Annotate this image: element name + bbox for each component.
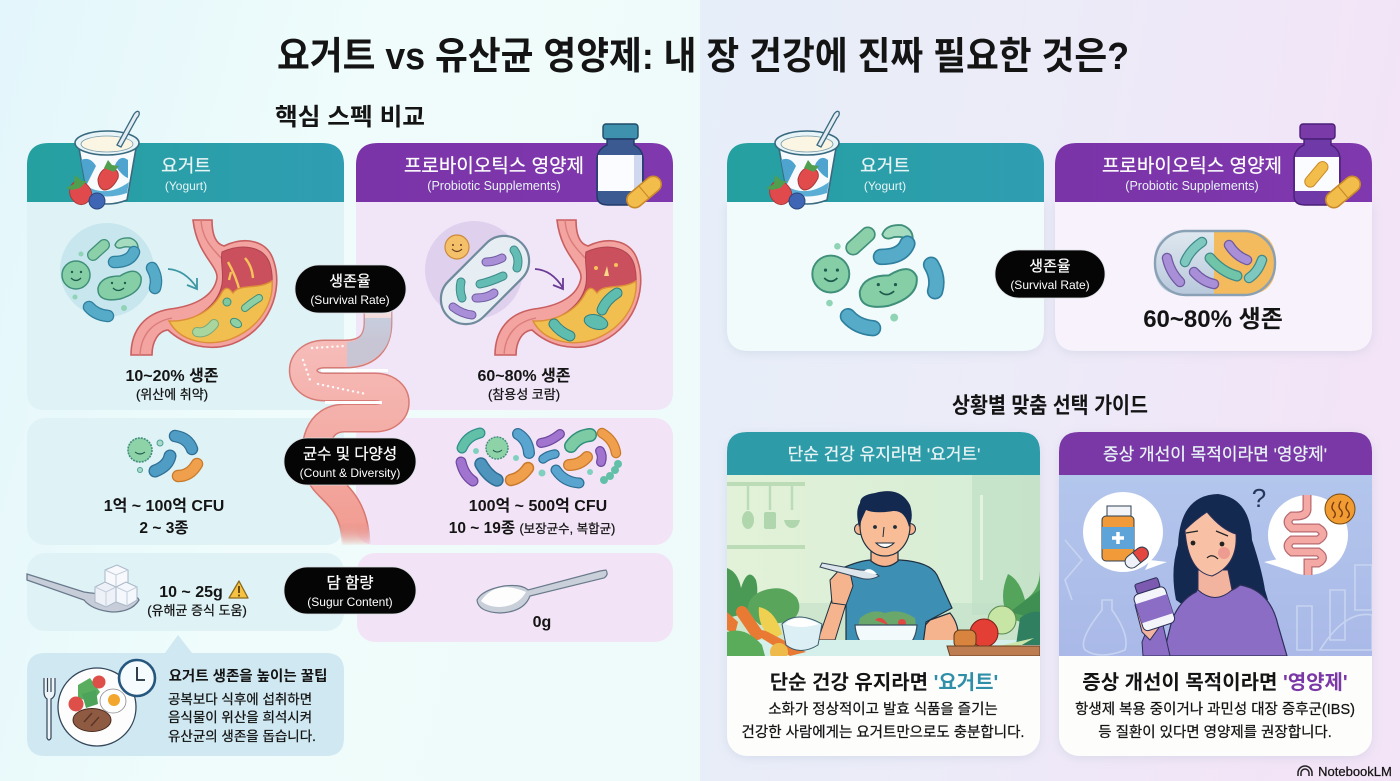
card base [727, 432, 1040, 756]
text: supplement CFU [449, 497, 615, 537]
logo: NotebookLM: NotebookLM [1318, 764, 1392, 779]
speech bubble: irritated intestine [1264, 494, 1355, 575]
text: tip heading and body: 요거트 생존을 높이는 꿀팁 [169, 668, 327, 685]
text: supplement guide: 항생제 복용 중이거나 과민성 대장 증후군(IBS) [1075, 701, 1355, 718]
text: yogurt guide: 단순 건강 유지라면 '요거트' [770, 671, 998, 694]
panel: yogurt survival [27, 111, 344, 410]
text: yogurt sugar [147, 584, 247, 618]
icon: yogurt cup with berries [66, 111, 139, 209]
arrow: bacteria to stomach [168, 269, 197, 289]
panel header: probiotic supplements: 프로바이오틱스 영양제 [1102, 155, 1282, 177]
title: 요거트 vs 유산균 영양제: 내 장 건강에 진짜 필요한 것은? [277, 36, 1129, 78]
text: supplement guide: 등 질환이 있다면 영양제를 권장합니다. [1098, 724, 1332, 741]
icon: yellow capsule [1323, 173, 1363, 211]
panel body [1055, 202, 1372, 351]
vegetables left [727, 568, 806, 661]
illustration: woman with symptoms [1059, 475, 1372, 656]
panel: supplement survival [356, 124, 673, 410]
card base [1059, 432, 1372, 756]
vegetables right [947, 570, 1040, 656]
row background [357, 553, 673, 642]
text: supplement CFU: 100억 ~ 500억 CFU [469, 497, 607, 515]
badge: survival rate [295, 265, 406, 313]
panel header: probiotic supplements: (Probiotic Supplements) [427, 179, 561, 193]
speech bubble: medicine [1083, 492, 1167, 572]
badge: survival rate: (Survival Rate) [310, 293, 390, 307]
panel header: probiotic supplements [356, 143, 673, 202]
illustration: bacteria cluster [812, 225, 936, 328]
badge: sugar content [284, 567, 416, 614]
text: 60~80% survival: (참용성 코람) [488, 387, 560, 402]
icon: purple supplement bottle [1294, 124, 1340, 205]
row background [356, 418, 673, 545]
text: 0g: 0g [533, 614, 551, 631]
text: tip heading and body: 유산균의 생존을 돕습니다. [168, 729, 316, 744]
table [727, 640, 1040, 656]
panel header: yogurt: 요거트 [860, 156, 910, 176]
card: supplement guide [1059, 432, 1372, 756]
illustration: man eating healthy food [727, 475, 1040, 661]
icon: empty spoon with white powder [477, 570, 607, 613]
text: yogurt guide [742, 671, 1024, 741]
question mark: ? [1252, 483, 1266, 513]
text: yogurt CFU [104, 497, 224, 537]
panel header: yogurt: 요거트 [161, 156, 211, 176]
illustration: half-orange capsule [1154, 231, 1276, 295]
icon: clock [119, 660, 155, 696]
badge: count and diversity: (Count & Diversity) [300, 466, 400, 480]
text: tip heading and body: 공복보다 식후에 섭취하면 [168, 692, 312, 707]
text: tip heading and body [168, 668, 327, 744]
man: hand with spoon [820, 563, 879, 605]
text: supplement guide: 증상 개선이 목적이라면 '영양제' [1082, 671, 1348, 694]
icon: yogurt cup with berries [766, 111, 839, 209]
callout: yogurt survival tip [27, 635, 344, 756]
icon: diverse bacteria [461, 433, 622, 484]
heading: situation guide: 상황별 맞춤 선택 가이드 [952, 393, 1148, 418]
icon: plate of food [58, 668, 136, 746]
panel header: yogurt [727, 143, 1044, 202]
badge: right survival rate [995, 250, 1105, 298]
text: tip heading and body: 음식물이 위산을 희석시켜 [168, 710, 312, 725]
text: 60~80% survival [477, 367, 571, 402]
man: head [854, 491, 916, 556]
man: shirt and arms [820, 551, 958, 640]
text: supplement guide [1075, 671, 1355, 741]
card header: 증상 개선이 목적이라면 '영양제' [1103, 445, 1327, 464]
card: yogurt guide [727, 432, 1040, 756]
badge: sugar content: 담 함량 [326, 574, 374, 592]
panel: supplement count and diversity [356, 418, 673, 545]
badge: count and diversity [284, 438, 416, 485]
woman: hair [1173, 494, 1268, 610]
panel header: yogurt: (Yogurt) [165, 179, 207, 193]
badge: sugar content: (Sugur Content) [307, 595, 393, 609]
text: yogurt CFU: 2 ~ 3종 [139, 520, 189, 537]
row background [27, 418, 344, 545]
icon: warning triangle [229, 581, 248, 598]
text: yogurt sugar: (유해균 증식 도움) [147, 603, 247, 618]
icon: yellow capsule [624, 173, 664, 211]
card header [727, 432, 1040, 475]
badge: right survival rate: (Survival Rate) [1010, 278, 1090, 292]
text: supplement CFU: 10 ~ 19종 (보장균수, 복합균) [449, 520, 615, 537]
panel body [27, 202, 344, 410]
panel header: yogurt [27, 143, 344, 202]
text: yogurt guide: 건강한 사람에게는 요거트만으로도 충분합니다. [742, 724, 1024, 741]
card header [1059, 432, 1372, 475]
card header: 단순 건강 유지라면 '요거트' [788, 445, 980, 464]
text: 10~20% survival: (위산에 취약) [136, 387, 208, 402]
panel header: yogurt: (Yogurt) [864, 179, 906, 193]
panel: right yogurt survival [727, 111, 1044, 351]
text: 60~80% survival: 60~80% 생존 [477, 367, 571, 385]
panel header: probiotic supplements: (Probiotic Supplements) [1125, 179, 1259, 193]
text: 10~20% survival: 10~20% 생존 [125, 367, 219, 385]
illustration: stomach with probiotics [495, 220, 641, 355]
illustration: intestine tube [303, 300, 395, 545]
text: 60~80% survival: 60~80% 생존 [1143, 306, 1283, 333]
salad bowl [854, 611, 918, 640]
text: yogurt sugar: 10 ~ 25g [159, 584, 223, 601]
text: yogurt guide: 소화가 정상적이고 발효 식품을 즐기는 [768, 701, 998, 718]
row background [27, 553, 344, 631]
panel body [356, 202, 673, 410]
panel header: probiotic supplements [1055, 143, 1372, 202]
icon: teal supplement bottle [597, 124, 643, 205]
panel body [727, 202, 1044, 351]
woman: neck and face [1185, 512, 1236, 598]
woman: sweater [1163, 585, 1287, 656]
arrow: capsule to stomach [535, 269, 563, 289]
panel: supplement sugar content [357, 553, 673, 642]
woman: hand holding bottle [1134, 577, 1176, 656]
illustration: capsule in purple bubble [425, 221, 539, 334]
panel header: probiotic supplements: 프로바이오틱스 영양제 [404, 155, 584, 177]
badge: right survival rate: 생존율 [1029, 258, 1071, 275]
illustration: stomach with acid [131, 220, 277, 355]
text: yogurt CFU: 1억 ~ 100억 CFU [104, 497, 224, 515]
badge: count and diversity: 균수 및 다양성 [303, 445, 397, 463]
heading: key spec comparison: 핵심 스펙 비교 [275, 104, 425, 131]
text: 10~20% survival [125, 367, 219, 402]
panel: yogurt sugar content [27, 553, 344, 631]
icon: spoon with sugar cubes [27, 565, 139, 612]
panel: right supplement survival [1055, 124, 1372, 351]
illustration: bacteria bubble [60, 223, 156, 317]
badge: survival rate: 생존율 [329, 273, 371, 290]
icon: yogurt bacteria [128, 436, 197, 476]
icon: fork [44, 678, 55, 740]
panel: yogurt count and diversity [27, 418, 344, 545]
yogurt bowl [782, 617, 822, 650]
